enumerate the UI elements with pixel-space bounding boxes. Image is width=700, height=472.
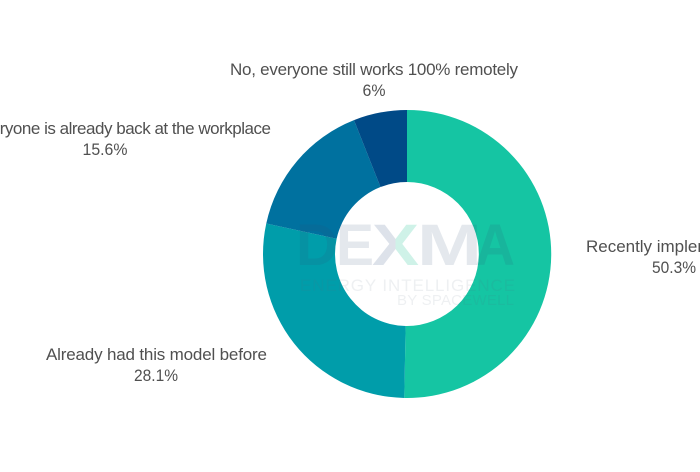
label: already had model: Already had this model before [46,345,267,364]
segment: recently implemented 50.3% [404,110,551,398]
segment: already had this model 28.1% [263,223,406,398]
segment: everyone back at workplace 15.6% [266,120,380,239]
label: already had model: 28.1% [134,366,178,385]
watermark byline: BY SPACEWELL [397,292,514,309]
label: still remote [230,60,518,100]
watermark letter A: A [475,213,515,278]
watermark letter X: X [372,213,419,278]
watermark letter D: D [296,213,338,278]
donut chart [263,110,551,398]
watermark letter M: M [417,213,482,278]
label: still remote: No, everyone still works 100% remotely [230,60,518,79]
watermark tagline: ENERGY INTELLIGENCE [300,276,515,295]
label: back at workplace: 15.6% [82,140,128,159]
label: still remote: 6% [362,81,386,100]
label: already had model [46,345,267,385]
watermark: DEXMA logo [296,213,515,309]
label: recently implemented: 50.3% [652,258,696,277]
watermark letter E: E [336,213,374,278]
label: recently implemented [586,237,700,277]
segment: still remote 6% [354,110,407,187]
label: back at workplace [0,119,271,159]
